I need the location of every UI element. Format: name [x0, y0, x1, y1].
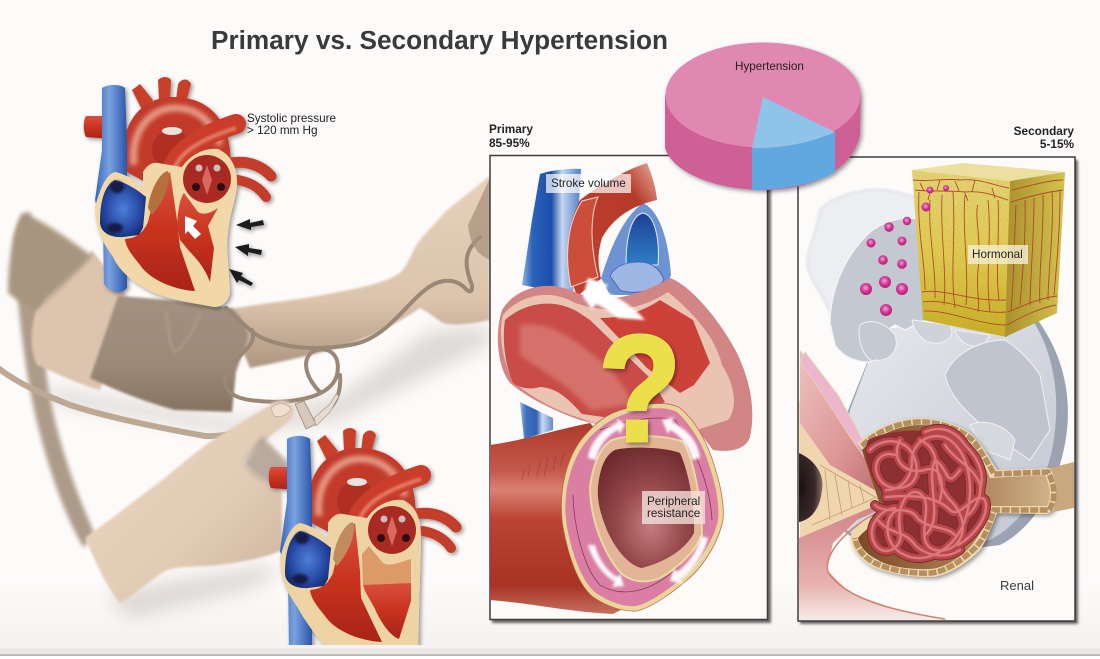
stroke volume label: [546, 174, 631, 193]
tubule cells around lumen: [799, 400, 884, 540]
peripheral resistance label: [642, 491, 705, 524]
panel frame: [492, 158, 771, 623]
hormone spheres: [860, 217, 911, 316]
muscle band: [501, 292, 734, 432]
white arrow: [185, 216, 201, 239]
hormonal label: Hormonal: [972, 248, 1023, 261]
title: Primary vs. Secondary Hypertension: [211, 25, 668, 55]
renal label: Renal: [1000, 578, 1034, 593]
pie label: Hypertension: [735, 60, 804, 73]
heart diagram: hypertensive: [84, 77, 271, 307]
superior vena cava: [95, 85, 127, 292]
panel: secondary hypertension: [798, 157, 1078, 624]
heart body outer wall: [498, 278, 752, 451]
label: secondary share: 5-15%: [1040, 137, 1075, 151]
white stroke arrow: [583, 278, 645, 320]
aorta: [568, 163, 657, 296]
soft shadow under arm: [40, 325, 490, 618]
panel: primary hypertension: [490, 156, 771, 623]
heart diagram: normal: [269, 428, 456, 659]
distal tubule: [1050, 462, 1074, 512]
right hand fingers: [468, 178, 490, 260]
cortex lobe: [830, 218, 925, 362]
lower hand with pressure connector: [85, 394, 339, 603]
shirt sleeve: [8, 213, 92, 310]
pulmonary valve: [601, 203, 671, 295]
label: primary share: 85-95%: [489, 136, 530, 150]
inner wall: [590, 436, 702, 581]
secondary slice: [752, 97, 835, 190]
label: primary share: Primary: [489, 122, 533, 136]
peripheral resistance label: Peripheral: [647, 495, 700, 508]
ventricle cavities: [504, 304, 665, 420]
label: systolic pressure: Systolic pressure: [247, 112, 336, 125]
stroke volume label: Stroke volume: [551, 177, 626, 190]
left atrium: [183, 155, 231, 203]
lower vein: [520, 402, 553, 439]
renal corpuscle capsule: [850, 418, 1057, 577]
cuff: [90, 296, 248, 412]
black pressure arrows: [229, 219, 264, 286]
forearm: [225, 175, 490, 368]
pie top: [666, 42, 860, 148]
medulla lobes: [859, 322, 896, 361]
kidney: [838, 322, 1068, 548]
label: secondary share: Secondary: [1014, 124, 1074, 138]
constriction arrows: [588, 417, 708, 587]
heart wall: [95, 149, 237, 307]
peripheral resistance label: resistance: [647, 507, 700, 520]
capsule cells: [855, 422, 1054, 573]
left ventricle, partly filled: [362, 546, 411, 586]
hormonal label: [968, 245, 1028, 264]
question mark: ?: [598, 303, 682, 474]
left pulmonary stub: [84, 116, 112, 139]
efferent arteriole: [799, 502, 950, 620]
arch branches: [132, 77, 191, 112]
label: systolic pressure: > 120 mm Hg: [247, 124, 317, 137]
lumen: [598, 448, 694, 568]
pie side: [665, 95, 861, 190]
pulmonary veins: [230, 162, 271, 197]
pulmonary artery: [170, 124, 236, 176]
capillary network: [913, 179, 1063, 325]
vena cava: [522, 169, 581, 295]
right atrium: [100, 180, 146, 237]
artery wall cross-section: [561, 404, 723, 611]
adrenal capsule: [805, 188, 916, 314]
illustration: arm with blood pressure cuff: [0, 175, 490, 618]
hormone block: [912, 163, 1065, 337]
afferent arteriole: [800, 350, 876, 490]
aortic arch: [122, 97, 232, 190]
torso side: [14, 212, 94, 548]
pie chart: hypertension share: [665, 42, 861, 190]
tubing: [0, 237, 480, 436]
left ventricle: [177, 193, 218, 282]
upper arm: [32, 250, 130, 390]
secreted hormones: [922, 185, 949, 212]
artery cylinder: [490, 423, 621, 614]
right ventricle: [125, 172, 195, 291]
glomerulus tuft: [866, 429, 986, 558]
